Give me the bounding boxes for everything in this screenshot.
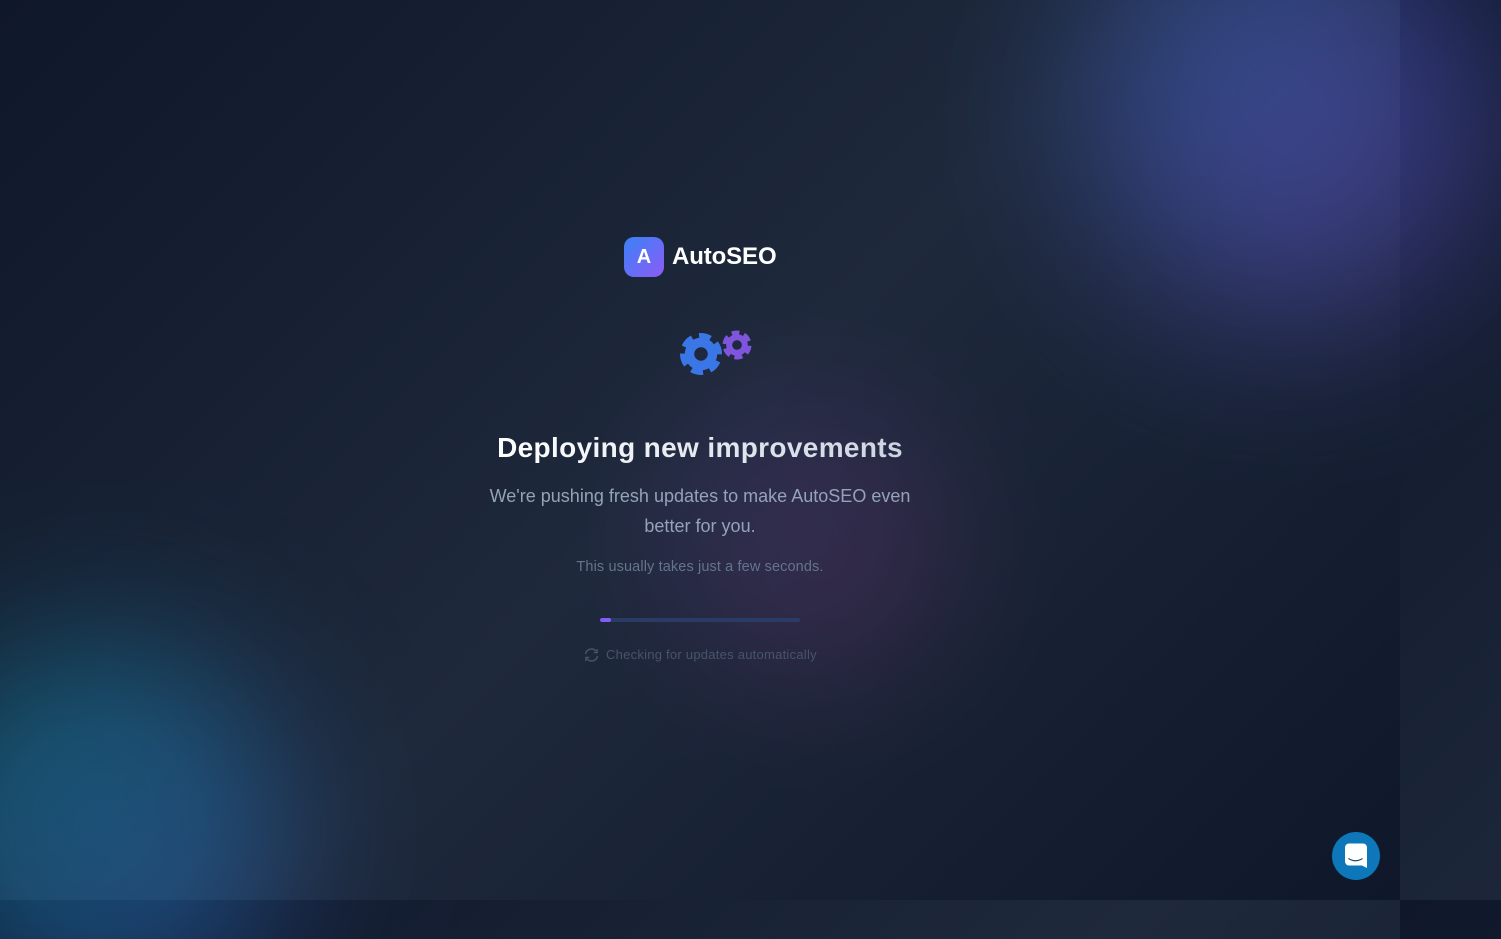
chat button bbox=[1332, 832, 1380, 880]
logo bbox=[624, 237, 776, 277]
description: better for you. bbox=[644, 516, 756, 536]
description: We're pushing fresh updates to make AutoSEO even bbox=[490, 486, 910, 506]
icon: sync bbox=[584, 648, 598, 662]
status text: Checking for updates automatically bbox=[606, 647, 817, 662]
note: This usually takes just a few seconds. bbox=[576, 559, 824, 575]
logo badge: A bbox=[637, 246, 651, 268]
logo badge bbox=[624, 237, 664, 277]
description bbox=[490, 486, 910, 536]
heading: Deploying new improvements bbox=[497, 432, 903, 463]
icon: chat bubble bbox=[1345, 844, 1367, 868]
glow: bottom left teal bbox=[0, 578, 356, 939]
icon: large blue gear bbox=[680, 333, 722, 375]
glow: centre purple bbox=[665, 395, 955, 685]
glow: top right blue-purple bbox=[1085, 0, 1495, 320]
progress fill bbox=[600, 618, 611, 622]
progress bar bbox=[600, 618, 800, 622]
icon: gears bbox=[680, 330, 752, 375]
status row bbox=[584, 647, 817, 662]
logo wordmark: AutoSEO bbox=[672, 243, 776, 270]
icon: small purple gear bbox=[723, 331, 751, 359]
